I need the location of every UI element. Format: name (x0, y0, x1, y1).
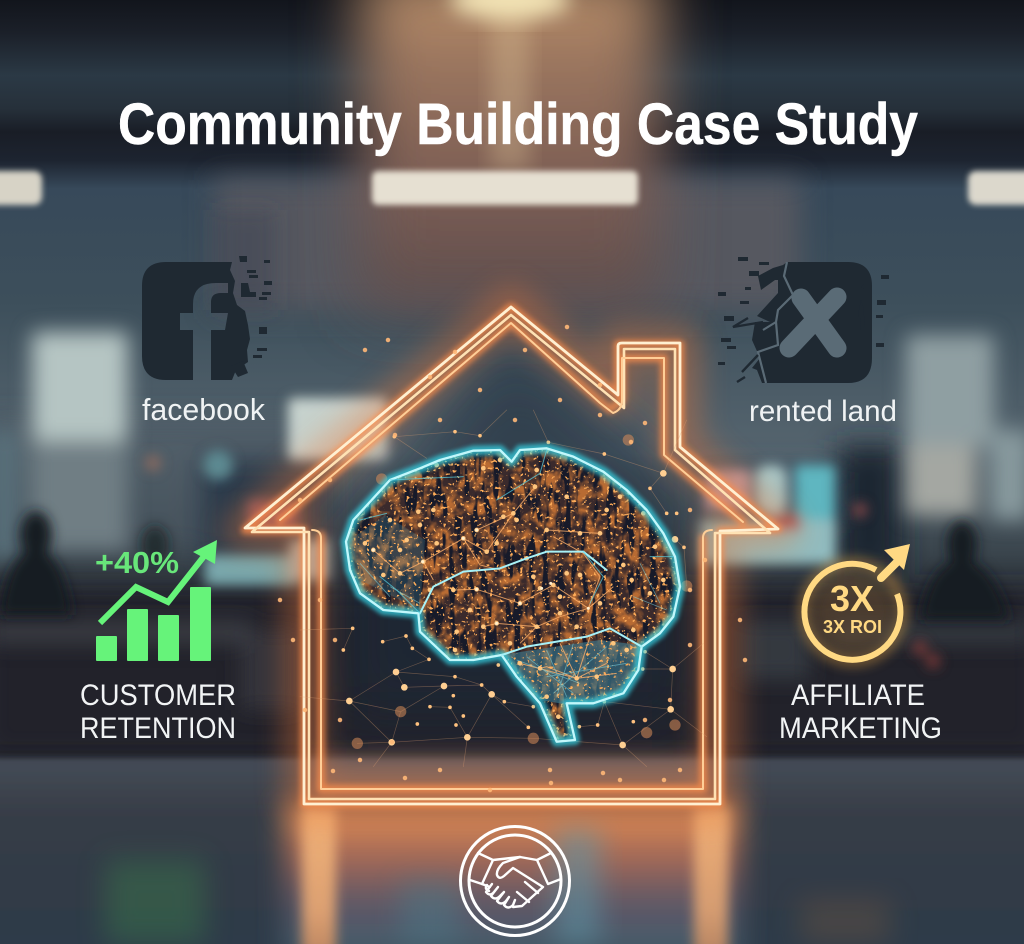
title: Community Building Case Study (118, 92, 918, 157)
glowing brain (340, 440, 690, 750)
dim house interior behind brain (340, 340, 680, 720)
3X ROI caption: 3X ROI (823, 617, 882, 637)
icon: broken facebook logo (142, 256, 272, 380)
label: rented land: rented land (749, 395, 897, 428)
icon: cracked rented land X (718, 257, 889, 383)
label: affiliate marketing: MARKETING (779, 712, 942, 745)
icon fragments (718, 257, 889, 365)
3X value: 3X (830, 578, 874, 619)
+40% value: +40% (95, 545, 179, 580)
icon: handshake (460, 826, 570, 936)
outer tube (245, 307, 778, 804)
brain filaments (373, 487, 617, 678)
label: affiliate marketing: AFFILIATE (791, 679, 925, 712)
inner tube (280, 323, 743, 789)
crack lines (758, 262, 802, 383)
teal cerebellum tint (500, 640, 642, 705)
label: customer retention: RETENTION (80, 712, 236, 745)
chart: customer retention +40% (95, 540, 217, 661)
brain dots (365, 460, 663, 717)
icon: 3X ROI badge (804, 544, 910, 661)
particle network around brain (300, 410, 707, 767)
label: facebook: facebook (142, 392, 265, 427)
cyan outline glow (346, 448, 680, 742)
X mark (789, 297, 837, 348)
brain textured fill (347, 450, 679, 740)
label: customer retention: CUSTOMER (80, 679, 236, 712)
icon fragments (231, 256, 272, 377)
warm glow at house base (310, 755, 715, 805)
scattered light particles in house (280, 327, 745, 790)
growth arrow (100, 555, 205, 623)
second tube (252, 315, 770, 799)
neon house outline (245, 307, 778, 804)
